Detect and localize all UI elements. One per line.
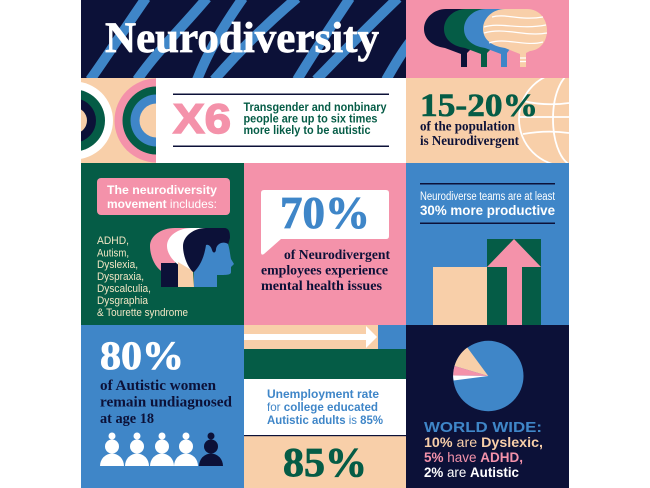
text: unemployment rate: Autistic adults is 85% bbox=[267, 413, 383, 427]
stat: 80%: 80% bbox=[100, 333, 184, 378]
panel: arrow band bbox=[244, 325, 406, 379]
panel: 70% statistic bbox=[244, 163, 406, 325]
panel: productivity bbox=[406, 163, 569, 325]
stat: X6: X6 bbox=[173, 95, 231, 142]
text: world wide figures bbox=[424, 435, 543, 480]
chart: pie bbox=[453, 341, 524, 411]
text: employees mental health: of Neurodivergent bbox=[284, 248, 390, 263]
text: employees mental health: mental health issues bbox=[261, 279, 383, 294]
text: world wide figures: 5% have ADHD, bbox=[424, 450, 523, 465]
stat: 15-20%: 15-20% bbox=[420, 88, 538, 124]
text: conditions list: Dyscalculia, bbox=[97, 283, 151, 295]
text: world wide figures: 2% are Autistic bbox=[424, 465, 519, 480]
panel: 15-20% statistic bbox=[406, 78, 569, 163]
text: unemployment rate bbox=[267, 387, 383, 427]
text: productivity statistic: 30% more productive bbox=[420, 203, 555, 218]
text: unemployment rate: for college educated bbox=[267, 400, 378, 414]
text: conditions list: Autism, bbox=[97, 248, 129, 260]
chart: rising bars with arrow bbox=[433, 239, 541, 325]
panel: X6 statistic bbox=[156, 78, 406, 163]
text: autistic women: remain undiagnosed bbox=[100, 394, 233, 410]
text: employees mental health: employees experience bbox=[261, 264, 388, 278]
panel: title bbox=[81, 0, 410, 80]
callout: movement heading: movement includes: bbox=[107, 197, 217, 211]
text: conditions list: ADHD, bbox=[97, 235, 129, 247]
panel: 85% statistic bbox=[244, 435, 406, 488]
stat: 85%: 85% bbox=[283, 439, 367, 485]
panel: neurodiversity movement bbox=[81, 163, 244, 325]
panel: concentric circles bbox=[81, 78, 156, 163]
callout: movement heading bbox=[97, 178, 230, 215]
icon: profile heads bbox=[150, 228, 234, 287]
panel: unemployment text bbox=[244, 379, 406, 435]
icon: navy brain bbox=[424, 9, 470, 67]
text: transgender statistic bbox=[244, 100, 387, 137]
panel: world wide bbox=[406, 325, 569, 488]
text: productivity statistic bbox=[420, 191, 556, 218]
text: transgender statistic: more likely to be autistic bbox=[244, 123, 371, 137]
text: of the population: is Neurodivergent bbox=[420, 133, 519, 148]
text: autistic women bbox=[100, 378, 233, 427]
icon: green brain bbox=[444, 9, 490, 67]
panel: 80% statistic bbox=[81, 325, 244, 488]
icon: blue brain bbox=[464, 9, 510, 67]
text: world wide figures: 10% are Dyslexic, bbox=[424, 435, 543, 450]
text: conditions list: Dyspraxia, bbox=[97, 271, 144, 283]
text: employees mental health bbox=[261, 248, 390, 294]
text: conditions list bbox=[97, 235, 188, 319]
icon: peach brain bbox=[483, 9, 547, 67]
text: conditions list: & Tourette syndrome bbox=[97, 307, 188, 319]
text: conditions list: Dysgraphia bbox=[97, 295, 149, 307]
heading: Neurodiversity: Neurodiversity bbox=[105, 15, 379, 62]
text: of the population bbox=[420, 118, 519, 148]
text: world wide heading: WORLD WIDE: bbox=[424, 419, 542, 436]
text: transgender statistic: Transgender and nonbinary bbox=[244, 100, 387, 114]
text: productivity statistic: Neurodiverse teams are at least bbox=[420, 191, 556, 203]
icon: five people bbox=[100, 432, 223, 466]
arrow: white right arrow bbox=[244, 326, 377, 348]
text: autistic women: of Autistic women bbox=[100, 378, 217, 394]
icon: globe bbox=[518, 78, 569, 163]
text: conditions list: Dyslexia, bbox=[97, 259, 138, 271]
callout: speech bubble bbox=[261, 190, 389, 255]
text: autistic women: at age 18 bbox=[100, 411, 154, 427]
text: transgender statistic: people are up to six times bbox=[244, 112, 378, 126]
panel: brains illustration bbox=[406, 0, 569, 78]
callout: movement heading: The neurodiversity bbox=[107, 183, 217, 197]
text: unemployment rate: Unemployment rate bbox=[267, 387, 379, 401]
text: of the population: of the population bbox=[420, 118, 515, 134]
stat: 70%: 70% bbox=[280, 188, 370, 238]
